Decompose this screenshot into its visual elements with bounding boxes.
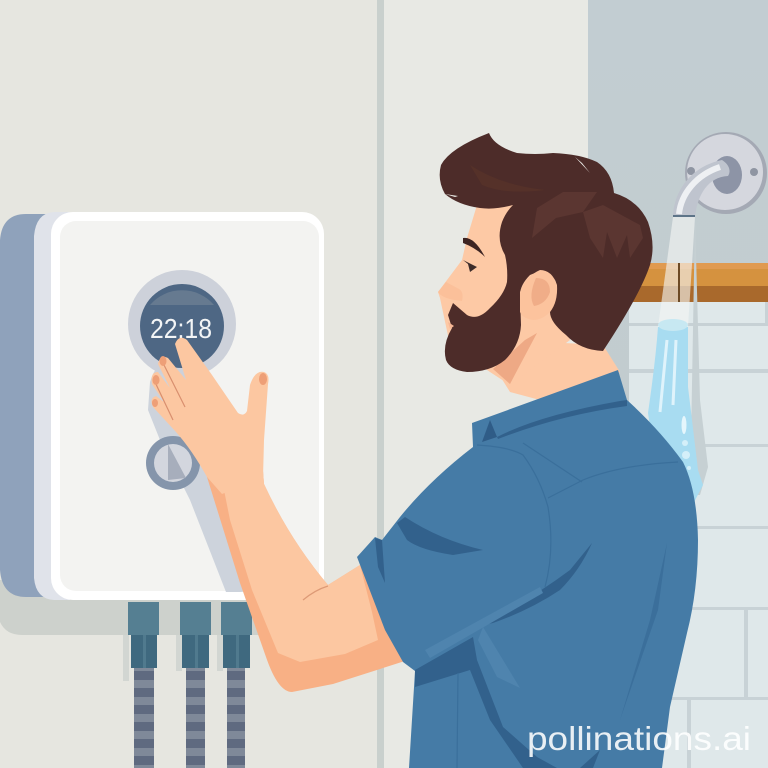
beard and hair [440, 133, 653, 372]
wall bracket behind hand [148, 356, 268, 592]
watermark: pollinations.ai [527, 720, 751, 757]
water stream [648, 217, 708, 510]
man: hand [152, 338, 268, 494]
face [438, 195, 570, 385]
quiff highlight [470, 165, 545, 192]
quiff strand [445, 194, 458, 197]
display dial [128, 270, 236, 378]
neck shadow [493, 333, 537, 384]
pipe middle [176, 602, 211, 768]
digital time readout: 22:18 [150, 313, 212, 344]
water heater body [34, 212, 324, 600]
lower knob [146, 436, 200, 490]
tiled wall [629, 302, 768, 768]
wooden shelf [630, 263, 768, 302]
water heater side panel [0, 214, 60, 597]
wall tap [673, 132, 767, 218]
man: neck [495, 340, 620, 400]
pipes [123, 602, 252, 768]
pipe right [217, 602, 252, 768]
hair highlights [532, 192, 643, 258]
pipe left [123, 602, 159, 768]
lip [448, 322, 454, 329]
man: head [438, 133, 653, 385]
ear [520, 270, 557, 320]
man: arm [207, 458, 408, 692]
man: shirt [357, 370, 698, 768]
eye [463, 260, 477, 272]
water heater wall shadow [0, 580, 262, 635]
hair sliver [575, 157, 590, 173]
nose [438, 282, 463, 301]
eyebrow [463, 238, 485, 257]
